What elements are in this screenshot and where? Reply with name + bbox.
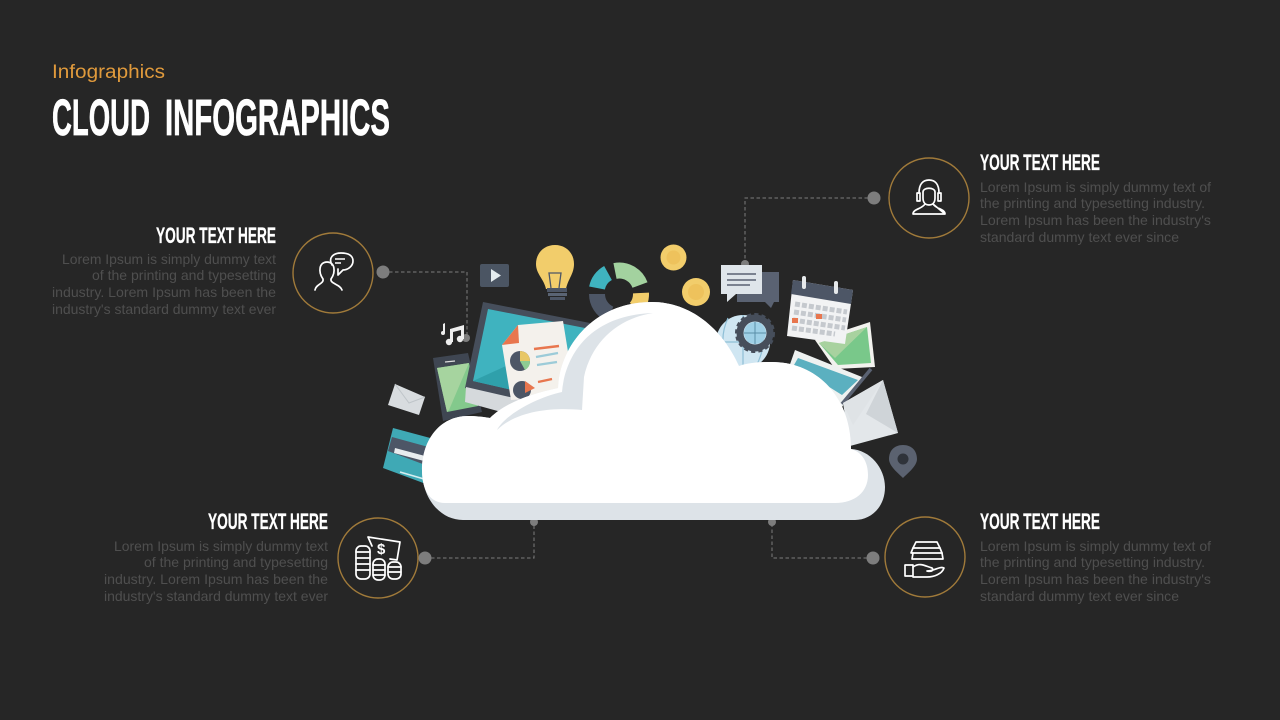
subtitle: Infographics	[52, 62, 165, 83]
icon: large envelope	[843, 380, 898, 446]
icon: light bulb	[536, 245, 574, 300]
text: bottom left: industry's standard dummy text ever	[104, 588, 328, 604]
text: bottom right: Lorem Ipsum is simply dummy text of	[980, 538, 1211, 554]
cloud white front	[422, 302, 868, 503]
icon: gear	[737, 315, 773, 351]
icon: mini envelope	[388, 384, 425, 415]
connector: top left	[376, 266, 470, 342]
cloud shadow base	[422, 302, 885, 520]
icon: speech bubbles	[721, 265, 779, 308]
text: bottom right: Lorem Ipsum has been the industry's	[980, 571, 1211, 587]
text: top left: YOUR TEXT HERE	[156, 223, 276, 248]
connector: top right	[741, 192, 880, 268]
badge: bottom right hand with stack	[885, 517, 965, 597]
icon: document with charts	[502, 321, 575, 400]
badge: top left people chat	[293, 233, 373, 313]
connector: bottom right	[768, 518, 880, 564]
icon: globe	[716, 315, 770, 369]
badge: bottom left money	[338, 518, 418, 598]
text: top left: industry. Lorem Ipsum has been the	[52, 284, 276, 300]
icon: teal photo	[788, 350, 871, 410]
badge: bottom left money: $	[377, 541, 386, 558]
icon: music notes	[441, 323, 464, 345]
text: top left: Lorem Ipsum is simply dummy text	[62, 251, 276, 267]
text: bottom left: YOUR TEXT HERE	[208, 509, 328, 534]
text: bottom left: industry. Lorem Ipsum has been the	[104, 571, 328, 587]
text: bottom left: Lorem Ipsum is simply dummy text	[114, 538, 328, 554]
cloud	[422, 302, 885, 520]
icon: donut chart	[597, 271, 641, 314]
icon: credit card	[383, 428, 434, 484]
text: bottom right: standard dummy text ever since	[980, 588, 1179, 604]
text: top left: industry's standard dummy text ever	[52, 301, 276, 317]
icon: calendar	[787, 278, 853, 344]
text: top right: Lorem Ipsum is simply dummy text of	[980, 179, 1211, 195]
text: bottom right: YOUR TEXT HERE	[980, 509, 1100, 534]
text: top right: YOUR TEXT HERE	[980, 150, 1100, 175]
text: top right	[980, 150, 1211, 245]
icon: location pin	[889, 445, 917, 478]
text: top right: the printing and typesetting industry.	[980, 195, 1205, 211]
badge: top right headset	[889, 158, 969, 238]
text: top left: of the printing and typesetting	[92, 267, 276, 283]
text: bottom left	[104, 509, 328, 604]
text: top right: standard dummy text ever since	[980, 229, 1179, 245]
text: bottom right	[980, 509, 1211, 604]
title: CLOUD	[52, 89, 150, 146]
icon: coins	[660, 244, 710, 306]
title: INFOGRAPHICS	[165, 89, 390, 146]
text: top left	[52, 223, 276, 317]
title	[52, 89, 390, 146]
text: top right: Lorem Ipsum has been the industry's	[980, 212, 1211, 228]
icon: monitor	[465, 302, 590, 420]
text: bottom left: of the printing and typesetting	[144, 554, 328, 570]
connector: bottom left	[418, 518, 538, 564]
cloud inner crescent	[497, 313, 653, 430]
icon: green photo	[815, 322, 875, 369]
icon: smartphone	[433, 353, 482, 421]
icon: video player	[480, 264, 509, 287]
text: bottom right: the printing and typesetting industry.	[980, 554, 1205, 570]
